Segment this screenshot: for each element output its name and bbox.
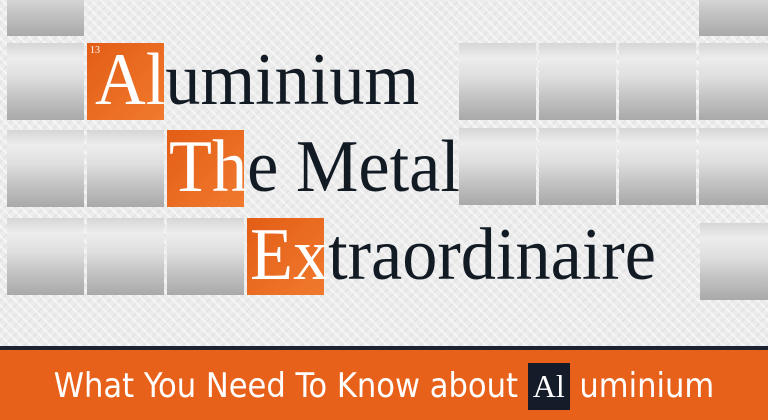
banner text: Al <box>533 368 565 404</box>
title line 3: Extraordinaire: Extraordinaire <box>250 214 656 296</box>
element tile Ex <box>247 218 324 295</box>
metal tiles right <box>459 0 768 300</box>
element tile Al: 13 <box>90 45 100 56</box>
title line 1: Aluminium: Aluminium <box>95 39 419 121</box>
element tile Th <box>167 130 244 207</box>
element tile Al <box>87 43 164 120</box>
title line 2: The Metal: The Metal <box>169 126 460 208</box>
banner text: What You Need To Know about uminium <box>54 366 714 406</box>
banner <box>0 346 768 420</box>
metal tiles left <box>7 0 244 295</box>
